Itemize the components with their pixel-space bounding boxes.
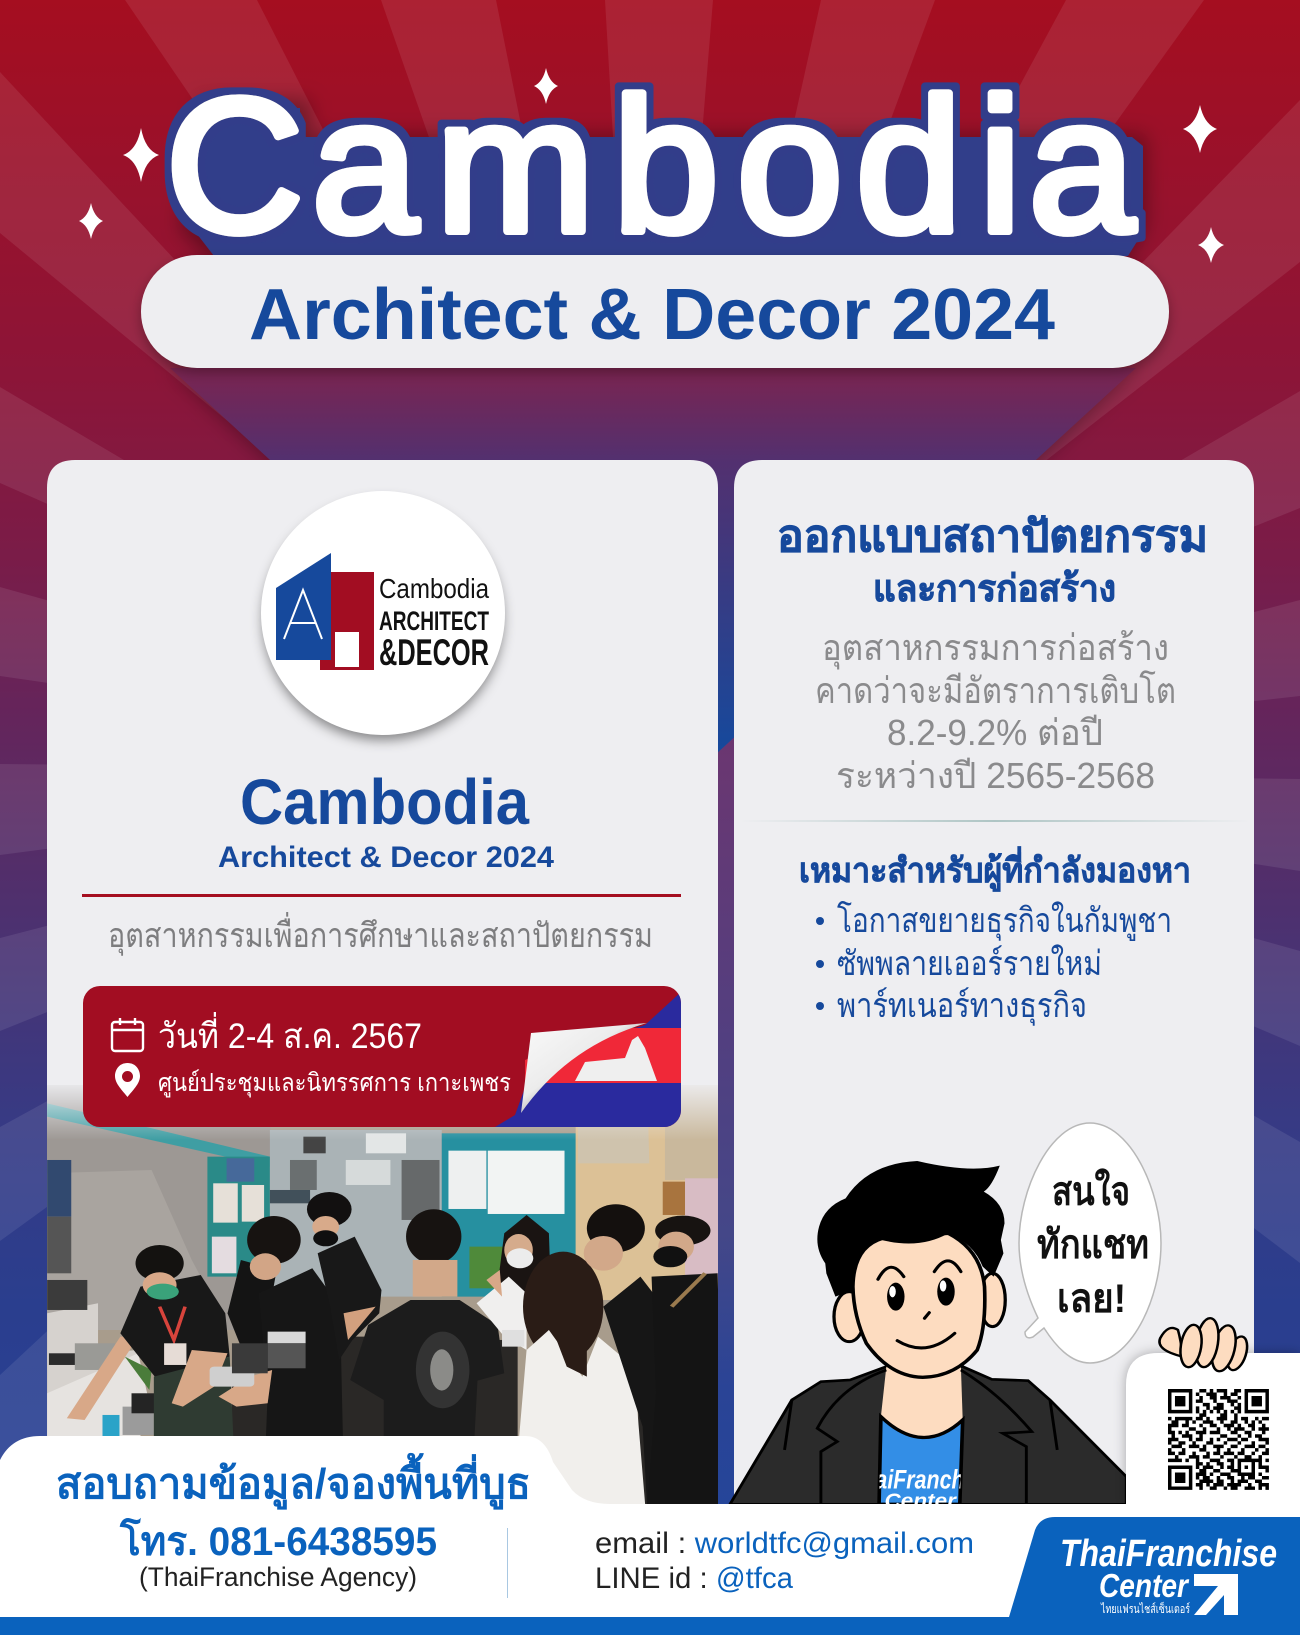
audience heading: เหมาะสำหรับผู้ที่กำลังมองหา — [799, 846, 1191, 892]
Cambodia flag corner — [495, 992, 681, 1127]
footer line id: LINE id : @tfca — [595, 1562, 793, 1595]
purple trapezoid beam under title — [170, 368, 1136, 812]
photo top fade — [47, 1080, 718, 1140]
growth text: คาดว่าจะมีอัตราการเติบโต — [815, 670, 1176, 711]
mascot jacket lapels — [785, 1370, 1057, 1504]
logo wordmark: &DECOR — [379, 632, 489, 673]
ThaiFranchise Center logo block: Center — [1099, 1567, 1190, 1604]
heading — [777, 512, 1208, 609]
person: man in black hoodie — [584, 1204, 656, 1504]
person: boy with glasses — [307, 1192, 381, 1360]
audience list: โอกาสขยายธุรกิจในกัมพูชา — [837, 901, 1172, 941]
person: woman with white mask — [477, 1215, 551, 1350]
growth text: อุตสาหกรรมการก่อสร้าง — [822, 627, 1169, 670]
mascot shirt — [875, 1417, 965, 1512]
subtitle pill — [141, 255, 1169, 373]
speech bubble: เลย! — [1057, 1277, 1126, 1321]
icon: arrow — [1194, 1574, 1238, 1615]
date and venue card with flag — [83, 986, 681, 1127]
date and venue card with flag: วันที่ 2-4 ส.ค. 2567 — [158, 1012, 422, 1056]
speech bubble: สนใจ — [1052, 1168, 1130, 1214]
mascot hair — [817, 1161, 1005, 1297]
person: back-turned boy in black — [210, 1216, 343, 1436]
mascot brows, nose and smile — [878, 1261, 961, 1348]
QR card panel — [1126, 1317, 1300, 1505]
QR code — [1168, 1389, 1269, 1490]
speech bubble: ทักแชท — [1037, 1223, 1149, 1267]
footer email: email : worldtfc@gmail.com — [595, 1527, 974, 1560]
footer blue bar — [0, 1617, 1300, 1635]
footer enquiry heading: สอบถามข้อมูล/จองพื้นที่บูธ — [56, 1452, 531, 1510]
ThaiFranchise Center logo block — [1009, 1517, 1300, 1617]
event name — [218, 766, 554, 874]
date and venue card with flag: ศูนย์ประชุมและนิทรรศการ เกาะเพชร — [158, 1069, 511, 1098]
person: boy seen from behind — [350, 1209, 504, 1436]
person: man in black mask — [647, 1216, 723, 1507]
mascot shirt: aiFranch — [875, 1464, 965, 1494]
industry label: อุตสาหกรรมเพื่อการศึกษาและสถาปัตยกรรม — [108, 912, 653, 956]
QR card shadow — [1126, 1353, 1300, 1505]
growth text — [815, 627, 1176, 796]
audience list: ซัพพลายเออร์รายใหม่ — [837, 944, 1102, 983]
mascot eyes — [887, 1278, 955, 1311]
growth text: ระหว่างปี 2565-2568 — [836, 755, 1155, 796]
sparkles around title — [79, 68, 1224, 263]
title: Cambodia: Cambodia — [166, 60, 1135, 272]
footer phone: โทร. 081-6438595 — [119, 1518, 437, 1564]
panel: event info (left) — [40, 460, 723, 1507]
person: woman in white shirt — [513, 1252, 645, 1507]
logo wordmark — [379, 573, 489, 673]
footer agency: (ThaiFranchise Agency) — [139, 1562, 417, 1592]
ThaiFranchise Center logo block: ไทยแฟรนไชส์เซ็นเตอร์ — [1100, 1601, 1190, 1616]
audience list: พาร์ทเนอร์ทางธุรกิจ — [837, 987, 1087, 1026]
icon: location pin — [115, 1063, 140, 1097]
growth text: 8.2-9.2% ต่อปี — [887, 712, 1103, 753]
person: staff in green mask — [66, 1245, 234, 1436]
mascot character — [730, 1161, 1126, 1512]
subtitle pill: Architect & Decor 2024 — [249, 275, 1055, 355]
footer white band — [0, 1436, 1300, 1635]
audience list — [816, 901, 1172, 1026]
event logo circle — [261, 491, 505, 740]
mascot shirt: Center — [885, 1488, 958, 1512]
logo wordmark: ARCHITECT — [379, 606, 489, 636]
logo wordmark: Cambodia — [379, 573, 489, 604]
event name: Architect & Decor 2024 — [218, 841, 554, 874]
heading: ออกแบบสถาปัตยกรรม — [777, 512, 1208, 561]
logo mark: building — [276, 553, 374, 670]
mascot face — [853, 1233, 985, 1377]
mascot hand holding card — [1159, 1317, 1251, 1373]
mascot jacket — [730, 1367, 1126, 1504]
mascot ears — [834, 1273, 1005, 1342]
gap strip between panels — [718, 720, 734, 1510]
mascot neck — [881, 1367, 963, 1438]
dark lower background between visitors — [232, 1337, 656, 1507]
heading: และการก่อสร้าง — [873, 568, 1116, 609]
photo: exhibition booth visitors — [40, 1083, 723, 1507]
icon: calendar — [112, 1018, 143, 1051]
speech bubble — [1019, 1123, 1161, 1363]
panel: industry details (right) — [730, 460, 1300, 1512]
event name: Cambodia — [240, 766, 529, 838]
